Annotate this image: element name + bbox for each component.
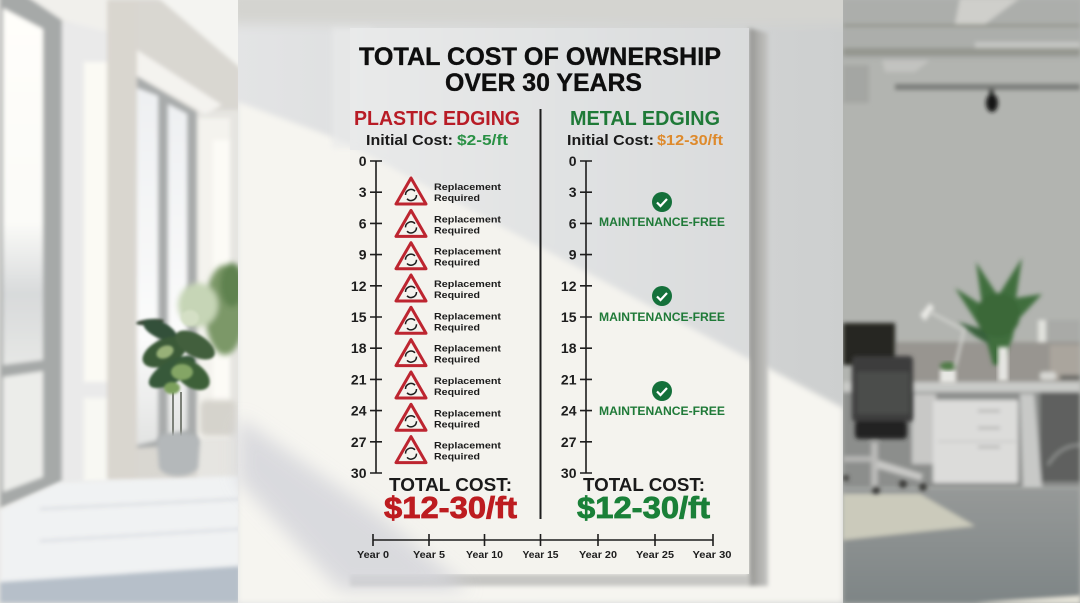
timeline axis: plastic: 9 <box>359 246 367 262</box>
initial cost: metal <box>567 132 723 149</box>
icon: replacement warning year 3: Replacement <box>434 182 502 193</box>
icon: replacement warning year 27: Required <box>434 452 480 463</box>
icon: replacement warning year 9: Required <box>434 258 480 269</box>
heading: metal edging: METAL EDGING <box>570 108 720 130</box>
icon: replacement warning year 27: Replacement <box>434 441 502 452</box>
total cost: metal <box>577 474 710 525</box>
maintenance-free badge 2 <box>599 286 725 324</box>
track light <box>895 84 1080 112</box>
timeline axis: metal: 21 <box>561 372 577 388</box>
timeline axis: metal: 3 <box>569 184 577 200</box>
total cost: plastic: TOTAL COST: <box>389 474 512 495</box>
icon: replacement warning year 9: Replacement <box>434 247 502 258</box>
horizontal year timeline <box>357 534 732 561</box>
initial cost: plastic: Initial Cost: <box>366 132 453 149</box>
floor <box>843 488 1080 603</box>
panel: metal edging <box>561 108 725 525</box>
horizontal year timeline: Year 15 <box>522 549 559 561</box>
wall with light and shadow <box>228 0 853 603</box>
icon: replacement warning year 15: Required <box>434 322 480 333</box>
horizontal year timeline: Year 25 <box>636 549 674 561</box>
timeline axis: plastic: 12 <box>351 278 367 294</box>
icon: replacement warning year 24: Required <box>434 419 480 430</box>
icon: replacement warning year 15 <box>396 307 502 333</box>
timeline axis: metal: 6 <box>569 216 577 232</box>
timeline axis: metal: 18 <box>561 340 577 356</box>
monitor <box>843 323 895 365</box>
icon: replacement warning year 6: Replacement <box>434 214 502 225</box>
timeline axis: metal: 0 <box>569 153 577 169</box>
icon: replacement warning year 18 <box>396 340 502 366</box>
icon: replacement warning year 3: Required <box>434 193 480 204</box>
timeline axis: metal: 15 <box>561 309 577 325</box>
horizontal year timeline: Year 10 <box>466 549 503 561</box>
title <box>359 43 721 97</box>
horizontal year timeline: Year 5 <box>413 549 445 561</box>
initial cost: plastic <box>366 132 508 149</box>
icon: replacement warning year 6: Required <box>434 225 480 236</box>
horizontal year timeline: Year 0 <box>357 549 389 561</box>
timeline axis: plastic: 27 <box>351 434 367 450</box>
total cost: metal: $12-30/ft <box>577 490 710 525</box>
timeline axis: plastic: 18 <box>351 340 367 356</box>
maintenance-free badge 2: MAINTENANCE-FREE <box>599 312 725 324</box>
total cost: plastic <box>384 474 517 525</box>
timeline axis: plastic: 21 <box>351 372 367 388</box>
panel: plastic edging <box>351 108 520 525</box>
maintenance-free badge 1: MAINTENANCE-FREE <box>599 217 725 229</box>
office chair <box>843 356 927 494</box>
icon: back plant and pot <box>178 263 245 436</box>
timeline axis: plastic: 15 <box>351 309 367 325</box>
timeline axis: metal: 27 <box>561 434 577 450</box>
timeline axis: plastic <box>351 153 382 481</box>
timeline axis: metal: 24 <box>561 402 577 418</box>
maintenance-free badge 3: MAINTENANCE-FREE <box>599 406 725 418</box>
timeline axis: plastic: 30 <box>351 465 367 481</box>
icon: replacement warning year 15: Replacement <box>434 311 502 322</box>
icon: replacement warning year 12: Replacement <box>434 279 502 290</box>
right office scene background <box>843 0 1080 603</box>
maintenance-free badge 3 <box>599 381 725 418</box>
timeline axis: plastic: 6 <box>359 216 367 232</box>
horizontal year timeline: Year 20 <box>579 549 617 561</box>
initial cost: metal: $12-30/ft <box>657 132 723 149</box>
replacement warnings <box>396 178 502 463</box>
center divider <box>540 109 542 519</box>
left office scene background <box>0 0 245 603</box>
timeline axis: plastic: 3 <box>359 184 367 200</box>
heading: plastic edging: PLASTIC EDGING <box>354 108 520 130</box>
poster shadow <box>350 28 768 586</box>
icon: replacement warning year 12: Required <box>434 290 480 301</box>
initial cost: metal: Initial Cost: <box>567 132 654 149</box>
timeline axis: metal: 30 <box>561 465 577 481</box>
partition and desk <box>843 320 1080 488</box>
timeline axis: metal: 12 <box>561 278 577 294</box>
icon: replacement warning year 6 <box>396 210 502 236</box>
icon: replacement warning year 18: Replacement <box>434 344 502 355</box>
timeline axis: metal: 9 <box>569 246 577 262</box>
icon: replacement warning year 24 <box>396 404 502 430</box>
icon: replacement warning year 9 <box>396 243 502 269</box>
diagonal shadow band <box>238 417 470 590</box>
title: OVER 30 YEARS <box>445 69 642 97</box>
initial cost: plastic: $2-5/ft <box>457 132 508 149</box>
timeline axis: plastic: 24 <box>351 402 367 418</box>
total cost: plastic: $12-30/ft <box>384 490 517 525</box>
poster panel <box>238 20 760 590</box>
horizontal year timeline: Year 30 <box>692 549 732 561</box>
icon: replacement warning year 3 <box>396 178 502 204</box>
timeline axis: metal <box>561 153 592 481</box>
icon: replacement warning year 27 <box>396 437 502 463</box>
icon: replacement warning year 24: Replacement <box>434 408 502 419</box>
icon: desk plant and vase <box>920 258 1042 383</box>
title: TOTAL COST OF OWNERSHIP <box>359 43 721 71</box>
floor <box>0 476 240 603</box>
icon: replacement warning year 21: Replacement <box>434 376 502 387</box>
maintenance-free badge 1 <box>599 192 725 229</box>
timeline axis: plastic: 0 <box>359 153 367 169</box>
icon: front plant and pot <box>136 310 220 476</box>
icon: replacement warning year 18: Required <box>434 355 480 366</box>
icon: replacement warning year 21 <box>396 372 502 398</box>
icon: replacement warning year 12 <box>396 275 502 301</box>
icon: replacement warning year 21: Required <box>434 387 480 398</box>
total cost: metal: TOTAL COST: <box>583 474 705 495</box>
